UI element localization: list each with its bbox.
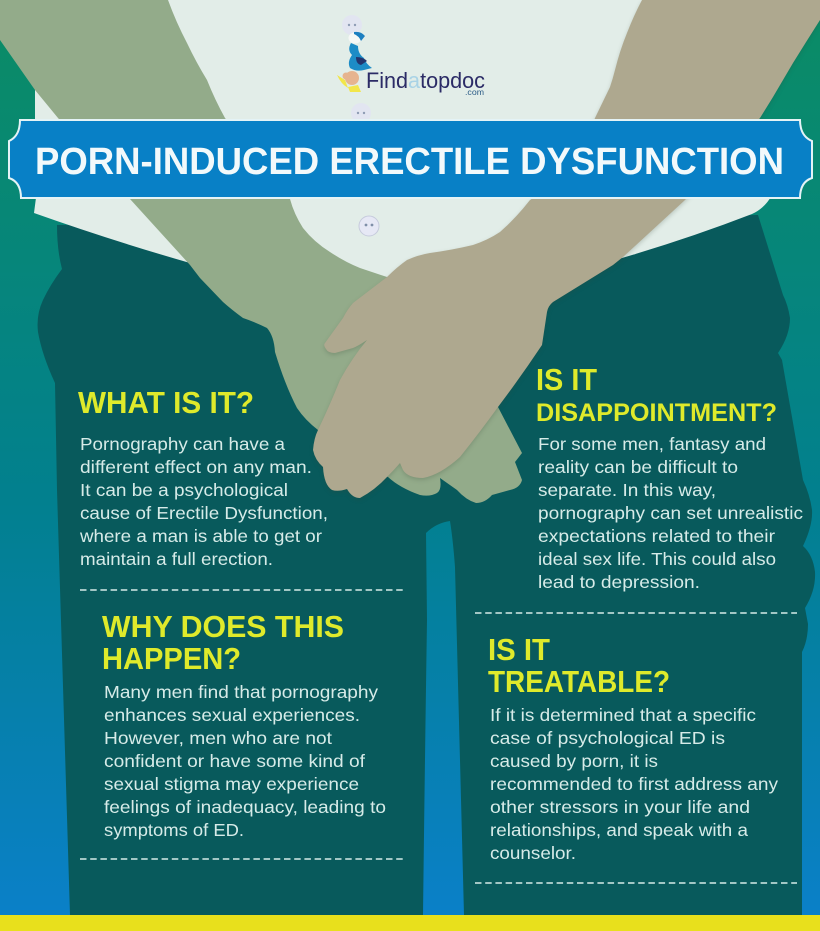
logo .com: .com (465, 88, 484, 97)
icon: duck mascot (337, 32, 372, 92)
text block: case of psychological ED is (490, 728, 725, 748)
text block: maintain a full erection. (80, 549, 273, 569)
text block: Many men find that pornography (104, 682, 378, 702)
text block: symptoms of ED. (104, 820, 244, 840)
left arm and hand (0, 0, 522, 503)
text block: confident or have some kind of (104, 751, 365, 771)
text block (490, 705, 778, 863)
title: PORN-INDUCED ERECTILE DYSFUNCTION (35, 141, 784, 183)
panel: what is it (78, 385, 328, 569)
footer bar (0, 915, 820, 931)
heading: WHAT IS IT? (78, 385, 254, 420)
heading: DISAPPOINTMENT? (536, 399, 777, 427)
text block: caused by porn, it is (490, 751, 658, 771)
text block: where a man is able to get or (79, 526, 322, 546)
text block: other stressors in your life and (490, 797, 750, 817)
panel: is it disappointment (536, 362, 803, 592)
shirt button bottom (359, 216, 379, 236)
text block (104, 682, 386, 840)
text block: cause of Erectile Dysfunction, (80, 503, 328, 523)
shirt button top (342, 15, 362, 35)
logo: Findatopdoc (337, 32, 485, 97)
text block: separate. In this way, (538, 480, 716, 500)
text block: For some men, fantasy and (538, 434, 766, 454)
banner plaque (9, 120, 812, 198)
heading (102, 609, 344, 676)
text block: feelings of inadequacy, leading to (104, 797, 386, 817)
text block (79, 434, 328, 569)
text block (538, 434, 803, 592)
heading: IS IT (536, 362, 597, 397)
text block: lead to depression. (538, 572, 700, 592)
text block: relationships, and speak with a (490, 820, 748, 840)
trousers (38, 215, 815, 915)
text block: pornography can set unrealistic (538, 503, 803, 523)
text block: Pornography can have a (80, 434, 285, 454)
text block: different effect on any man. (80, 457, 312, 477)
right arm and hand (313, 0, 820, 498)
shirt button middle (351, 103, 371, 123)
text block: expectations related to their (538, 526, 775, 546)
title banner (9, 120, 812, 198)
heading: WHY DOES THIS (102, 609, 344, 644)
heading: IS IT (488, 632, 550, 667)
heading: HAPPEN? (102, 641, 241, 676)
heading (536, 362, 777, 427)
logo wordmark: Findatopdoc (366, 68, 485, 93)
heading: TREATABLE? (488, 664, 670, 699)
text block: counselor. (490, 843, 576, 863)
text block: enhances sexual experiences. (104, 705, 360, 725)
text block: recommended to first address any (490, 774, 778, 794)
panel: is it treatable (488, 632, 778, 863)
text block: reality can be difficult to (538, 457, 738, 477)
heading (488, 632, 670, 699)
text block: sexual stigma may experience (104, 774, 359, 794)
text block: However, men who are not (104, 728, 332, 748)
text block: If it is determined that a specific (490, 705, 756, 725)
panel: why does this happen (102, 609, 386, 840)
text block: It can be a psychological (80, 480, 288, 500)
shirt (34, 0, 778, 279)
text block: ideal sex life. This could also (538, 549, 776, 569)
